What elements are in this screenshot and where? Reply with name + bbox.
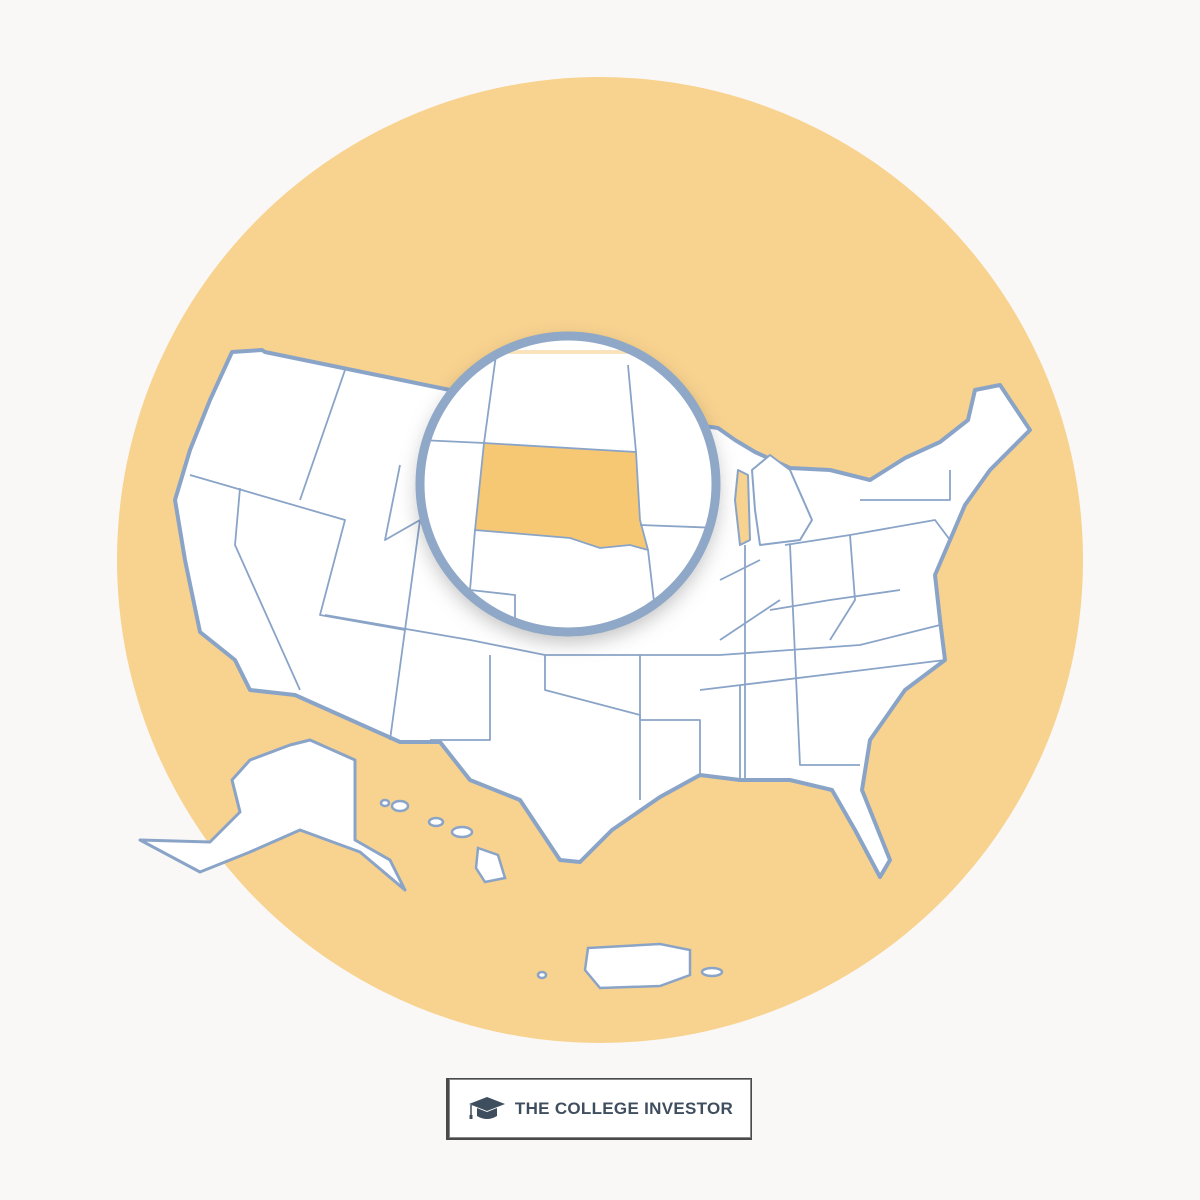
- lower 48 states: [175, 350, 1030, 877]
- south dakota: [475, 443, 648, 550]
- alaska: [140, 740, 405, 890]
- background circle: [117, 77, 1083, 1043]
- text: THE COLLEGE INVESTOR: [515, 1098, 733, 1118]
- map illustration: [117, 77, 1083, 1043]
- magnifier: [418, 334, 720, 640]
- icon: graduation cap: [469, 1097, 505, 1119]
- great lakes / michigan: [752, 455, 812, 545]
- hawaii: [381, 800, 505, 882]
- logo: [446, 1078, 752, 1140]
- puerto rico: [538, 944, 722, 988]
